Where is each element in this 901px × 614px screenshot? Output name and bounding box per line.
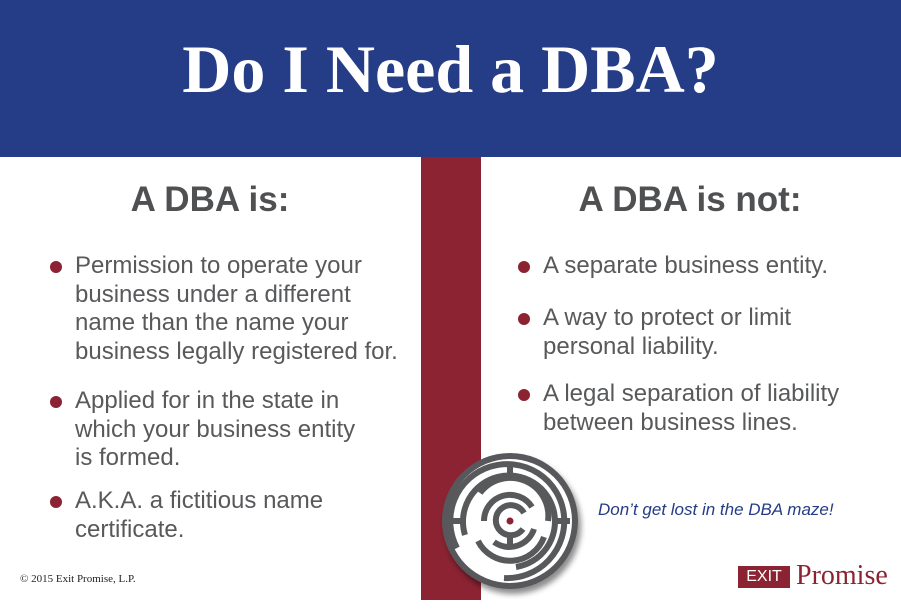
title: Do I Need a DBA? xyxy=(182,31,719,107)
logo: EXIT xyxy=(746,568,782,585)
list: is: business legally registered for. xyxy=(75,338,398,364)
list: is not: A separate business entity. xyxy=(543,252,828,279)
header banner xyxy=(0,0,901,157)
list: is: Permission to operate your xyxy=(75,252,362,279)
list: is: A.K.A. a fictitious name xyxy=(75,487,323,514)
logo: Promise xyxy=(796,560,888,591)
list: is: is formed. xyxy=(75,444,180,471)
divider bar xyxy=(421,157,481,600)
list: is: Applied for in the state in xyxy=(75,387,339,414)
list: is not xyxy=(518,252,839,436)
list: is: certificate. xyxy=(75,516,184,542)
list: is xyxy=(50,252,398,542)
list: is: which your business entity xyxy=(75,416,355,442)
icon: maze xyxy=(442,453,585,598)
list: is: business under a different xyxy=(75,280,351,308)
heading: A DBA is not: A DBA is not: xyxy=(579,180,801,219)
logo xyxy=(738,560,888,591)
list: is: name than the name your xyxy=(75,309,349,336)
list: is not: between business lines. xyxy=(543,408,798,436)
list: is not: personal liability. xyxy=(543,332,719,360)
copyright: © 2015 Exit Promise, L.P. xyxy=(20,573,136,585)
heading: A DBA is: A DBA is: xyxy=(131,180,289,219)
list: is not: A way to protect or limit xyxy=(543,304,791,331)
callout: Don’t get lost in the DBA maze! xyxy=(598,500,834,519)
list: is not: A legal separation of liability xyxy=(543,380,839,407)
